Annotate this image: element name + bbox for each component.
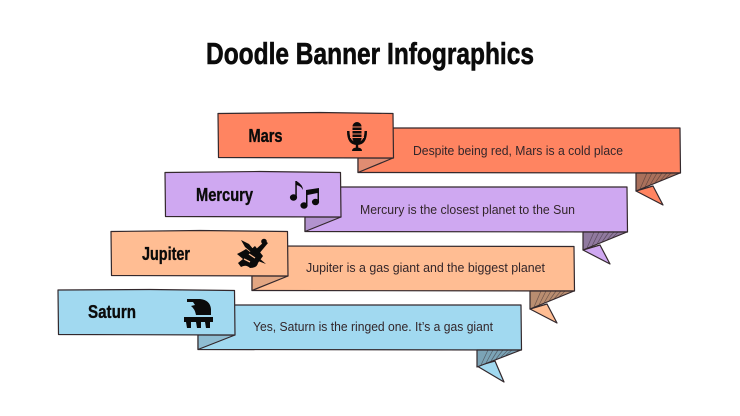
ribbon fold left: Saturn xyxy=(198,335,235,350)
ribbon fold left: Mars xyxy=(358,158,393,172)
description: Mars: Despite being red, Mars is a cold place xyxy=(413,143,623,158)
title: Doodle Banner Infographics xyxy=(206,36,534,71)
label panel: Mars xyxy=(218,112,394,158)
ribbon tail: Mars xyxy=(636,186,663,205)
ribbon fold left: Mercury xyxy=(305,217,341,232)
ribbon fold left: Jupiter xyxy=(252,276,288,290)
ribbon tail: Jupiter xyxy=(530,304,557,323)
description: Jupiter: Jupiter is a gas giant and the biggest planet xyxy=(306,260,545,275)
icon: music notes xyxy=(290,181,319,209)
description: Saturn: Yes, Saturn is the ringed one. It’s a gas giant xyxy=(253,319,493,334)
ribbon band: Saturn xyxy=(198,305,522,350)
label: Mercury: Mercury xyxy=(196,185,253,205)
description: Mercury: Mercury is the closest planet to the Sun xyxy=(360,202,575,217)
ribbon tail: Saturn xyxy=(477,361,504,382)
label panel: Jupiter xyxy=(111,230,288,276)
ribbon band: Jupiter xyxy=(252,246,574,291)
label: Mars: Mars xyxy=(248,126,282,146)
banner: Mercury xyxy=(165,172,628,264)
banner: Saturn xyxy=(58,290,522,382)
label: Saturn: Saturn xyxy=(88,302,136,322)
ribbon tail: Mercury xyxy=(583,245,610,264)
ribbon fold right: Jupiter xyxy=(530,291,574,309)
icon: microphone xyxy=(347,122,367,151)
ribbon band: Mercury xyxy=(305,187,628,232)
label panel: Saturn xyxy=(58,290,235,335)
ribbon fold right: Mercury xyxy=(583,232,627,250)
banner: Jupiter xyxy=(111,230,574,323)
icon: guitar and cross xyxy=(237,239,268,268)
label panel: Mercury xyxy=(165,172,341,217)
icon: grand piano xyxy=(184,299,213,328)
ribbon band: Mars xyxy=(358,128,680,173)
ribbon fold right: Mars xyxy=(636,173,680,191)
label: Jupiter: Jupiter xyxy=(142,244,190,264)
ribbon fold right: Saturn xyxy=(477,350,521,367)
banner: Mars xyxy=(218,112,680,205)
